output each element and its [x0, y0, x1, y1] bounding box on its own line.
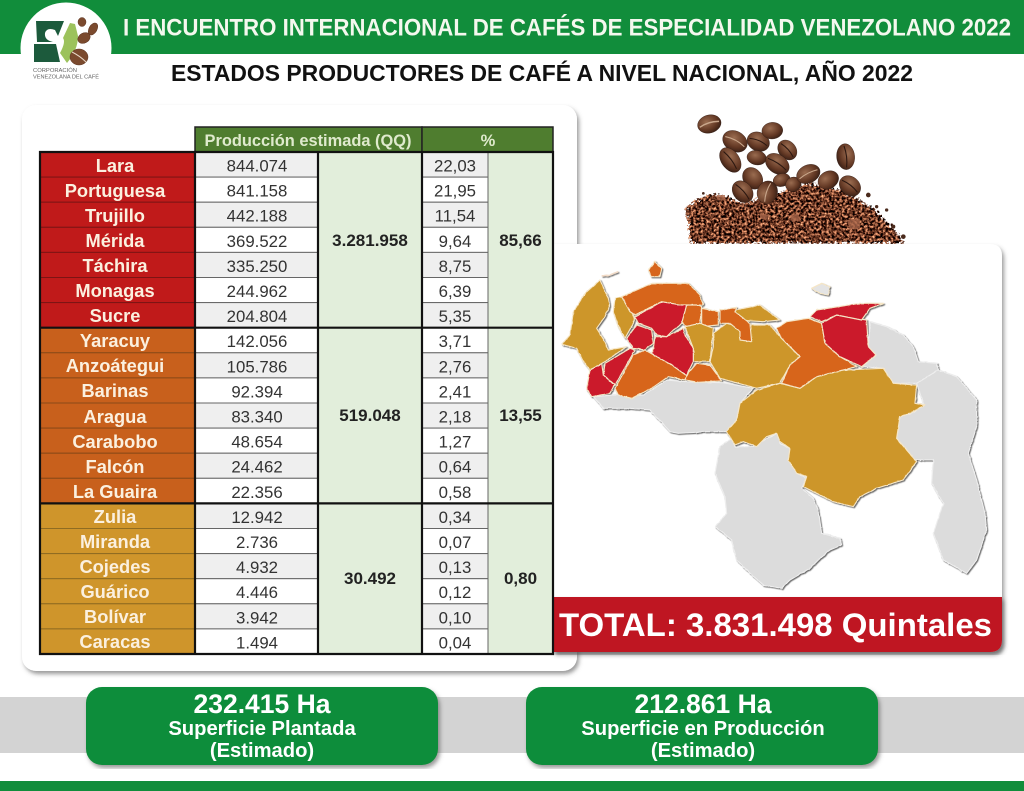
row: Guárico [40, 579, 488, 604]
footer band [0, 781, 1024, 791]
row: Táchira: Táchira [82, 255, 148, 276]
row: Mérida: Mérida [86, 230, 145, 251]
logo [20, 2, 112, 94]
row: Lara: Lara [96, 155, 135, 176]
row: Bolívar: 3.942 [236, 608, 278, 627]
row: La Guaira [40, 478, 488, 503]
row: Mérida [40, 227, 488, 252]
row: Barinas: Barinas [81, 380, 149, 401]
row: Guárico: Guárico [80, 581, 150, 602]
header band [0, 0, 1024, 54]
merged subtotal cells: 30.492 [344, 569, 396, 588]
row: Cojedes: 0,13 [439, 558, 471, 577]
row: Anzoátegui: Anzoátegui [66, 355, 164, 376]
row: Táchira: 335.250 [227, 257, 287, 276]
table: production by state [40, 127, 553, 654]
total banner [553, 597, 1002, 652]
subtitle: ESTADOS PRODUCTORES DE CAFÉ A NIVEL NACIONAL, AÑO 2022 [171, 59, 913, 86]
callout: planted area: Superficie Plantada [168, 718, 356, 740]
callout: area in production: (Estimado) [651, 740, 755, 762]
row: Falcón: 0,64 [439, 458, 471, 477]
callout: area in production: 212.861 Ha [634, 689, 772, 719]
row: Miranda: Miranda [80, 531, 151, 552]
image: coffee beans and ground coffee [685, 112, 906, 243]
row: Carabobo [40, 428, 488, 453]
row: Falcón: Falcón [86, 456, 144, 477]
row: Lara: 22,03 [434, 156, 476, 176]
row: Lara: 844.074 [227, 156, 287, 176]
row: Anzoátegui: 2,76 [439, 357, 471, 376]
merged subtotal cells: 13,55 [499, 406, 542, 425]
row: Trujillo: Trujillo [85, 205, 145, 226]
row: Zulia [40, 503, 488, 528]
row: Monagas [40, 278, 488, 303]
row: Bolívar: Bolívar [84, 606, 146, 627]
logo: VENEZOLANA DEL CAFÉ [33, 74, 99, 80]
row: Bolívar [40, 604, 488, 629]
row: Carabobo: Carabobo [72, 431, 158, 452]
row: Portuguesa: 21,95 [434, 182, 476, 201]
row: Sucre: Sucre [90, 305, 140, 326]
panel: table background [22, 105, 577, 671]
row: Cojedes [40, 554, 488, 579]
panel: map [553, 244, 1002, 652]
row: Monagas: Monagas [75, 280, 155, 301]
row: Trujillo: 442.188 [227, 207, 287, 226]
row: Cojedes: Cojedes [79, 556, 151, 577]
row: Yaracuy: Yaracuy [80, 330, 151, 351]
row: Sucre: 204.804 [227, 307, 287, 326]
row: Monagas: 244.962 [227, 282, 287, 301]
row: Monagas: 6,39 [439, 282, 471, 301]
row: Miranda: 2.736 [236, 533, 278, 552]
row: Anzoátegui: 105.786 [227, 357, 287, 376]
row: Sucre: 5,35 [439, 307, 471, 326]
row: Aragua: 2,18 [439, 408, 471, 426]
row: Aragua: Aragua [84, 406, 147, 427]
logo: CORPORACIÓN [33, 67, 77, 74]
row: Carabobo: 48.654 [231, 433, 283, 452]
row: Zulia: Zulia [94, 506, 137, 527]
merged subtotal cells: 3.281.958 [332, 231, 408, 250]
row: La Guaira: 0,58 [439, 483, 471, 502]
row: Barinas: 2,41 [439, 382, 471, 401]
callout: planted area: (Estimado) [210, 740, 314, 762]
row: Falcón: 24.462 [231, 458, 283, 477]
row: Yaracuy [40, 328, 488, 353]
merged subtotal cells: 519.048 [339, 406, 401, 425]
table header: % [481, 132, 496, 150]
row: Sucre [40, 303, 488, 328]
row: Yaracuy: 3,71 [439, 332, 471, 351]
table header: Producción estimada (QQ) [204, 132, 412, 150]
merged subtotal cells: 0,80 [504, 569, 537, 588]
row: Aragua: 83.340 [231, 408, 283, 426]
row: Aragua [40, 403, 488, 428]
row: Mérida: 369.522 [227, 232, 287, 251]
table header [195, 127, 553, 152]
row: Cojedes: 4.932 [236, 558, 278, 577]
row: Portuguesa: 841.158 [227, 182, 287, 201]
callout: area in production: Superficie en Producción [581, 718, 825, 740]
row: La Guaira: 22.356 [231, 483, 283, 502]
row: Lara [40, 152, 488, 177]
row: Guárico: 4.446 [236, 583, 278, 602]
total banner: TOTAL: 3.831.498 Quintales [559, 607, 992, 643]
row: Miranda [40, 528, 488, 554]
row: Carabobo: 1,27 [439, 433, 471, 452]
row: Yaracuy: 142.056 [227, 332, 287, 351]
row: La Guaira: La Guaira [73, 481, 158, 502]
row: Táchira: 8,75 [439, 257, 471, 276]
merged subtotal cells: 85,66 [499, 231, 542, 250]
row: Caracas [40, 629, 488, 654]
merged subtotal cells [318, 152, 553, 654]
row: Anzoátegui [40, 353, 488, 378]
callout: planted area: 232.415 Ha [193, 689, 331, 719]
row: Falcón [40, 453, 488, 478]
callout: area in production [526, 687, 878, 765]
row: Caracas: 0,04 [439, 633, 471, 652]
callout: planted area [86, 687, 438, 765]
row: Táchira [40, 252, 488, 278]
row: Mérida: 9,64 [439, 232, 471, 251]
row: Zulia: 12.942 [231, 508, 283, 527]
row: Barinas: 92.394 [231, 382, 283, 401]
row: Bolívar: 0,10 [439, 608, 471, 627]
map of Venezuela [562, 262, 987, 588]
row: Caracas: Caracas [79, 631, 151, 652]
row: Miranda: 0,07 [439, 533, 471, 552]
row: Portuguesa [40, 177, 488, 202]
row: Guárico: 0,12 [439, 583, 471, 602]
row: Barinas [40, 378, 488, 403]
row: Portuguesa: Portuguesa [65, 180, 166, 201]
row: Trujillo [40, 202, 488, 227]
row: Trujillo: 11,54 [435, 207, 475, 226]
row: Zulia: 0,34 [439, 508, 471, 527]
row: Caracas: 1.494 [236, 633, 278, 652]
